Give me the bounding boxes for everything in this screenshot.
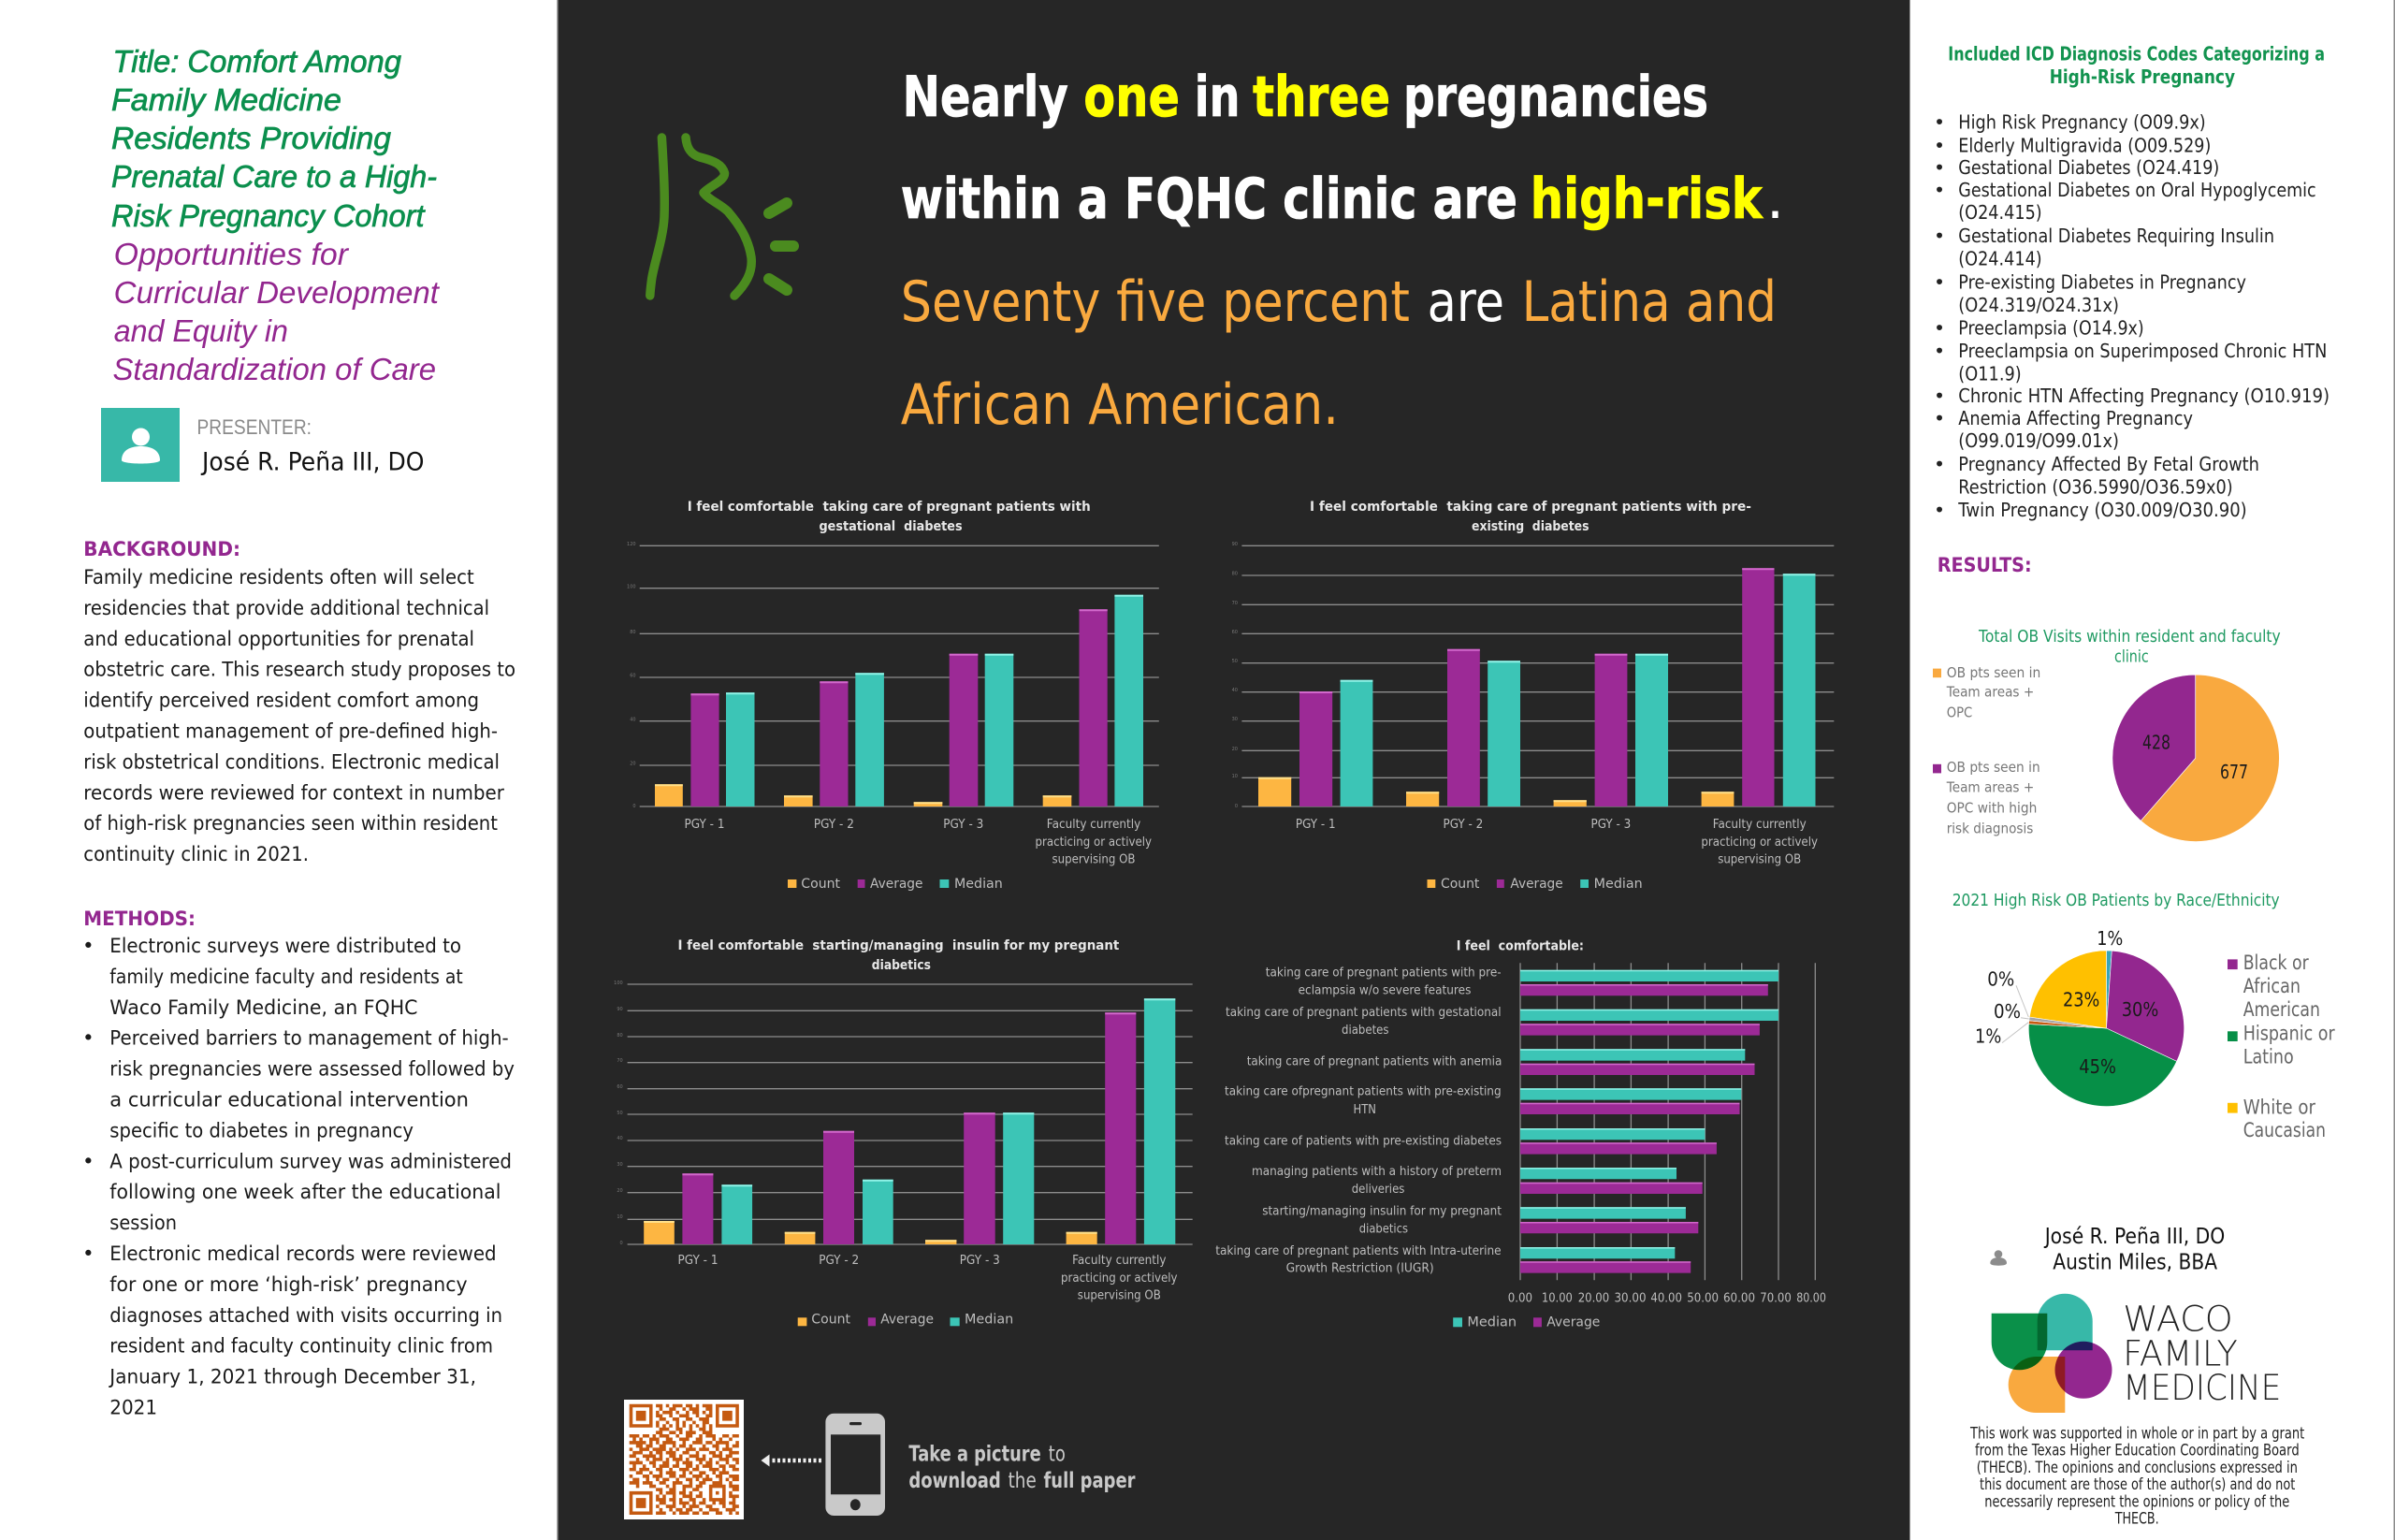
category labels: PGY - 3 (960, 1254, 1000, 1268)
list: ICD codes: (O99.019/O99.01x) (1958, 429, 2119, 452)
legend: Caucasian (2243, 1119, 2326, 1141)
chart title: I feel comfortable starting/managing insulin for my pregnant (677, 938, 1119, 953)
category labels: managing patients with a history of preterm (1252, 1165, 1502, 1179)
category labels: supervising OB (1078, 1289, 1161, 1303)
chart title: I feel comfortable: (1457, 939, 1584, 954)
authors (2043, 1225, 2225, 1275)
category labels: supervising OB (1052, 853, 1136, 867)
panel: dark centre background (558, 0, 1910, 1540)
list: ICD codes: Chronic HTN Affecting Pregnancy (O10.919) (1958, 385, 2330, 407)
legend: Average (880, 1312, 934, 1327)
list: ICD codes: • (1934, 110, 1945, 133)
y axis ticks: 80 (1232, 571, 1238, 576)
bar chart: gestational diabetes (627, 500, 1159, 892)
list: ICD codes: • (1934, 179, 1945, 201)
y axis ticks: 50 (1232, 659, 1238, 664)
legend: Average (1546, 1315, 1600, 1330)
headline statistic: . (1766, 167, 1784, 232)
legend: risk diagnosis (1947, 821, 2033, 837)
chart title: gestational diabetes (820, 519, 963, 534)
category labels (677, 1254, 1178, 1303)
value labels (1975, 927, 2158, 1078)
headline statistic: are (1428, 269, 1504, 335)
legend: Count (811, 1312, 851, 1327)
y axis ticks: 120 (627, 542, 636, 547)
text block: background: records were reviewed for context in number (83, 781, 504, 805)
y axis ticks: 40 (617, 1136, 623, 1141)
call to action text: full paper (1044, 1469, 1136, 1493)
legend: Black or (2243, 952, 2309, 974)
category labels (1215, 966, 1502, 1276)
category labels: eclampsia w/o severe features (1299, 983, 1472, 997)
value labels: 677 (2220, 761, 2248, 783)
category labels: practicing or actively (1061, 1271, 1178, 1286)
bar chart: insulin (614, 938, 1193, 1327)
legend: Latino (2243, 1045, 2294, 1068)
logo: Waco Family Medicine (1992, 1294, 2281, 1413)
list: ICD codes: • (1934, 225, 1945, 247)
x axis labels: 10.00 (1542, 1292, 1573, 1306)
chart title: clinic (2114, 648, 2149, 667)
heading: background: BACKGROUND: (83, 538, 240, 560)
category labels: taking care of pregnant patients with anemia (1247, 1055, 1502, 1069)
panel: left column (82, 44, 515, 1419)
heading: methods: METHODS: (83, 908, 196, 930)
category labels: taking care ofpregnant patients with pre-existing (1225, 1085, 1502, 1099)
text block: methods: • (82, 1150, 94, 1173)
y axis ticks (614, 981, 623, 1246)
logo wordmark (2123, 1300, 2281, 1408)
category labels: taking care of pregnant patients with gestational (1226, 1006, 1502, 1020)
text block: methods: family medicine faculty and residents at (109, 966, 463, 989)
category labels: Faculty currently (1713, 818, 1807, 832)
QR code (624, 1400, 744, 1519)
list: ICD codes: • (1934, 385, 1945, 407)
headline statistic: Nearly (903, 65, 1068, 130)
list: ICD codes: Preeclampsia (O14.9x) (1958, 316, 2144, 339)
disclaimer (1969, 1424, 2305, 1527)
category labels: Faculty currently (1047, 818, 1140, 832)
legend: Median (965, 1312, 1013, 1327)
icon: phone (825, 1414, 885, 1516)
call to action text: the (1009, 1469, 1037, 1493)
value labels: 45% (2079, 1055, 2116, 1078)
list: ICD codes: • (1934, 453, 1945, 475)
panel: right column (1933, 42, 2335, 1527)
text block: background: identify perceived resident comfort among (83, 690, 479, 713)
y axis ticks: 60 (617, 1084, 623, 1090)
title: Risk Pregnancy Cohort (111, 198, 426, 233)
title: Title: Comfort Among (112, 44, 402, 79)
authors: Austin Miles, BBA (2053, 1251, 2217, 1275)
chart title (1978, 628, 2281, 667)
text block: methods: A post-curriculum survey was administered (109, 1150, 512, 1173)
category labels: taking care of pregnant patients with Intra-uterine (1215, 1244, 1502, 1258)
category labels: PGY - 3 (943, 818, 983, 832)
y axis ticks: 30 (617, 1162, 623, 1168)
headline statistic: African American. (901, 372, 1339, 438)
icon: pregnant silhouette (650, 138, 793, 296)
list: ICD codes (1934, 110, 2330, 521)
legend (1933, 664, 2040, 837)
legend: Median (954, 877, 1003, 892)
disclaimer: necessarily represent the opinions or policy of the (1984, 1492, 2289, 1510)
y axis ticks: 30 (1232, 717, 1238, 722)
y axis ticks: 90 (617, 1007, 623, 1012)
title: Family Medicine (111, 82, 341, 117)
category labels: HTN (1353, 1103, 1376, 1117)
text block: methods: resident and faculty continuity clinic from (109, 1335, 493, 1358)
legend: Average (870, 877, 922, 892)
headline statistic: Seventy five percent (901, 269, 1410, 335)
legend: OPC with high (1947, 799, 2037, 816)
x axis labels: 30.00 (1615, 1292, 1647, 1306)
list: ICD codes: • (1934, 499, 1945, 521)
legend: OPC (1947, 704, 1972, 720)
x axis labels: 40.00 (1650, 1292, 1682, 1306)
legend: American (2243, 998, 2320, 1021)
bars: median (1341, 574, 1815, 806)
legend: OB pts seen in (1947, 759, 2040, 776)
list: ICD codes: Gestational Diabetes Requiring Insulin (1958, 225, 2274, 247)
headline statistic: high-risk (1531, 167, 1764, 232)
disclaimer: this document are those of the author(s) and do not (1980, 1475, 2296, 1493)
y axis ticks: 20 (617, 1188, 623, 1194)
list: ICD codes: Restriction (O36.5990/O36.59x0) (1958, 475, 2233, 498)
list: ICD codes: (O11.9) (1958, 362, 2022, 385)
category labels: PGY - 2 (814, 818, 854, 832)
y axis ticks: 10 (617, 1214, 623, 1220)
legend: Count (801, 877, 841, 892)
headline statistic: one (1083, 65, 1180, 130)
y axis ticks: 70 (1232, 601, 1238, 606)
text block: methods: • (82, 935, 94, 958)
legend: Median (1594, 877, 1643, 892)
text block: methods: specific to diabetes in pregnancy (109, 1119, 414, 1142)
text block: background: of high-risk pregnancies seen within resident (83, 812, 498, 835)
y axis ticks: 50 (617, 1111, 623, 1116)
y axis ticks: 60 (1232, 630, 1238, 635)
list: ICD codes: Gestational Diabetes on Oral Hypoglycemic (1958, 179, 2316, 201)
title: Opportunities for (114, 237, 350, 271)
list: ICD codes: Gestational Diabetes (O24.419) (1958, 156, 2219, 179)
text block: background: continuity clinic in 2021. (83, 843, 309, 866)
x axis labels: 50.00 (1687, 1292, 1719, 1306)
pie chart: race and ethnicity (1952, 892, 2335, 1141)
headline statistic: Latina and (1522, 269, 1777, 335)
legend: Average (1510, 877, 1563, 892)
presenter label: PRESENTER: (196, 415, 312, 439)
legend (788, 877, 1003, 892)
title: Residents Providing (111, 121, 392, 155)
list: ICD codes: Elderly Multigravida (O09.529) (1958, 134, 2211, 156)
chart title: I feel comfortable taking care of pregnant patients with (688, 500, 1091, 515)
bars: average (682, 1012, 1136, 1244)
x axis labels: 80.00 (1796, 1292, 1826, 1306)
category labels: taking care of patients with pre-existing diabetes (1225, 1134, 1502, 1148)
category labels: PGY - 1 (685, 818, 724, 832)
heading: ICD codes (1948, 42, 2325, 88)
text block: background: obstetric care. This research study proposes to (83, 659, 515, 682)
heading: results: RESULTS: (1938, 554, 2032, 576)
y axis ticks: 90 (1232, 542, 1238, 547)
bars: count (1258, 777, 1734, 806)
logo mark (1992, 1294, 2112, 1413)
text block: methods: January 1, 2021 through December 31, (108, 1366, 476, 1389)
headline statistic: pregnancies (1403, 65, 1708, 130)
value labels: 0% (1994, 1000, 2021, 1023)
legend (1428, 877, 1643, 892)
disclaimer: THECB. (2114, 1509, 2159, 1527)
y axis ticks: 40 (1232, 688, 1238, 693)
text block: methods: 2021 (109, 1396, 157, 1420)
y axis ticks: 60 (630, 674, 636, 679)
list: ICD codes: (O24.319/O24.31x) (1958, 294, 2119, 316)
y axis ticks: 100 (627, 584, 636, 589)
value labels: 0% (1987, 967, 2014, 990)
text block: methods: • (82, 1242, 94, 1266)
text block: methods: following one week after the educational (109, 1181, 501, 1204)
title: Prenatal Care to a High- (111, 159, 437, 194)
legend: White or (2243, 1096, 2315, 1118)
chart title: diabetics (872, 958, 931, 973)
bars: median (726, 595, 1143, 806)
list: ICD codes: • (1934, 407, 1945, 429)
headline statistic: within a FQHC clinic are (901, 167, 1517, 232)
headline statistic (901, 65, 1784, 438)
text block: background: residencies that provide additional technical (83, 597, 489, 620)
text block: methods: • (82, 1027, 94, 1051)
y axis ticks (1232, 542, 1238, 809)
text block: methods: session (109, 1212, 177, 1235)
text block: methods: Perceived barriers to management of high- (109, 1027, 509, 1051)
x axis labels (1508, 1292, 1826, 1306)
legend (1453, 1315, 1600, 1330)
title: Curricular Development (114, 275, 441, 310)
list: ICD codes: Pre-existing Diabetes in Pregnancy (1958, 270, 2246, 293)
legend: Hispanic or (2243, 1022, 2335, 1044)
call to action text (908, 1443, 1136, 1493)
y axis ticks: 70 (617, 1058, 623, 1064)
list: ICD codes: • (1934, 156, 1945, 179)
call to action text: Take a picture (908, 1443, 1041, 1467)
category labels (685, 818, 1152, 867)
y axis ticks: 100 (614, 981, 623, 986)
title: Standardization of Care (112, 352, 436, 386)
title: and Equity in (114, 313, 288, 348)
heading: ICD codes: High-Risk Pregnancy (2050, 65, 2235, 88)
logo wordmark: WACO (2123, 1300, 2233, 1340)
text block: background (83, 566, 515, 866)
category labels: Faculty currently (1072, 1254, 1167, 1268)
bars: average (1520, 984, 1768, 1273)
category labels: PGY - 2 (819, 1254, 859, 1268)
headline statistic: three (1253, 65, 1390, 130)
list: ICD codes: Pregnancy Affected By Fetal Growth (1958, 453, 2259, 475)
category labels: PGY - 2 (1443, 818, 1483, 832)
y axis ticks: 20 (630, 762, 636, 767)
y axis ticks: 0 (1235, 804, 1238, 809)
legend: Median (1467, 1315, 1517, 1330)
pie slices (2028, 951, 2185, 1107)
list: ICD codes: • (1934, 340, 1945, 362)
text block: background: risk obstetrical conditions. Electronic medical (83, 750, 500, 774)
presenter name: José R. Peña III, DO (200, 447, 425, 477)
text block: methods (82, 935, 515, 1420)
chart title: I feel comfortable taking care of pregnant patients with pre- (1310, 500, 1751, 515)
category labels: deliveries (1352, 1183, 1405, 1197)
call to action text: to (1049, 1443, 1066, 1467)
list: ICD codes: • (1934, 316, 1945, 339)
category labels: PGY - 3 (1590, 818, 1631, 832)
value labels: 428 (2142, 732, 2170, 754)
bar chart: pre-existing diabetes (1232, 500, 1834, 892)
y axis ticks: 0 (620, 1241, 623, 1246)
list: ICD codes: Preeclampsia on Superimposed Chronic HTN (1958, 340, 2327, 362)
y axis ticks: 20 (1232, 747, 1238, 752)
text block: background: Family medicine residents often will select (83, 566, 474, 589)
text block: background: outpatient management of pre-defined high- (83, 720, 498, 743)
x axis labels: 20.00 (1578, 1292, 1609, 1306)
y axis ticks (627, 542, 636, 809)
list: ICD codes: • (1934, 270, 1945, 293)
text block: methods: risk pregnancies were assessed followed by (109, 1058, 515, 1082)
x axis labels: 0.00 (1508, 1292, 1532, 1306)
chart title: 2021 High Risk OB Patients by Race/Ethnicity (1952, 892, 2280, 910)
text block: methods: for one or more ‘high-risk’ pregnancy (109, 1273, 468, 1297)
value labels: 1% (1975, 1025, 2001, 1048)
y axis ticks: 10 (1232, 774, 1238, 779)
category labels: practicing or actively (1701, 835, 1818, 850)
list: ICD codes: Anemia Affecting Pregnancy (1958, 407, 2193, 429)
text block: methods: Waco Family Medicine, an FQHC (109, 996, 418, 1020)
list: ICD codes: (O24.414) (1958, 248, 2042, 270)
chart title (688, 500, 1091, 534)
chart title (677, 938, 1119, 973)
category labels: starting/managing insulin for my pregnant (1262, 1204, 1502, 1218)
icon: presenter (101, 408, 180, 482)
pie chart: total OB visits (1933, 628, 2281, 841)
disclaimer: from the Texas Higher Education Coordinating Board (1975, 1441, 2300, 1459)
value labels: 30% (2122, 998, 2158, 1021)
category labels: PGY - 1 (1296, 818, 1336, 832)
authors: José R. Peña III, DO (2043, 1225, 2225, 1249)
legend: Team areas + (1946, 683, 2034, 700)
call to action text: download (908, 1469, 1001, 1493)
logo wordmark: MEDICINE (2123, 1368, 2281, 1408)
pie slices (2112, 675, 2279, 841)
text block: methods: a curricular educational intervention (109, 1089, 469, 1111)
bars: median (721, 998, 1175, 1244)
y axis ticks: 40 (630, 717, 636, 722)
bars: count (644, 1221, 1097, 1244)
text block: background: and educational opportunities for prenatal (83, 628, 474, 651)
legend (2228, 952, 2335, 1141)
y axis ticks: 0 (632, 804, 636, 809)
bars: median (1520, 970, 1778, 1258)
chart title: Total OB Visits within resident and faculty (1978, 628, 2281, 647)
x axis labels: 60.00 (1723, 1292, 1755, 1306)
value labels (2142, 732, 2248, 783)
text block: methods: diagnoses attached with visits occurring in (109, 1304, 502, 1328)
y axis ticks: 80 (617, 1033, 623, 1039)
category labels: diabetics (1359, 1222, 1408, 1236)
icon: authors (1990, 1250, 2007, 1266)
category labels: taking care of pregnant patients with pre- (1266, 966, 1502, 980)
bars: count (655, 784, 1071, 806)
legend (798, 1312, 1013, 1327)
chart title: existing diabetes (1472, 519, 1589, 534)
y axis ticks: 80 (630, 630, 636, 635)
x axis labels: 70.00 (1760, 1292, 1792, 1306)
category labels: diabetes (1342, 1024, 1389, 1038)
list: ICD codes: High Risk Pregnancy (O09.9x) (1958, 110, 2206, 133)
disclaimer: (THECB). The opinions and conclusions expressed in (1977, 1459, 2298, 1476)
list: ICD codes: • (1934, 134, 1945, 156)
headline statistic: in (1195, 65, 1240, 130)
legend: African (2243, 975, 2301, 997)
bars: average (690, 609, 1108, 806)
text block: methods: Electronic surveys were distributed to (109, 935, 461, 958)
category labels: PGY - 1 (677, 1254, 718, 1268)
text block: methods: Electronic medical records were reviewed (109, 1242, 497, 1266)
list: ICD codes: Twin Pregnancy (O30.009/O30.90) (1957, 499, 2247, 521)
legend: Team areas + (1946, 779, 2034, 796)
legend: OB pts seen in (1947, 664, 2040, 681)
chart title (1310, 500, 1751, 534)
logo wordmark: FAMILY (2123, 1333, 2238, 1373)
title (111, 44, 441, 386)
legend: Count (1441, 877, 1480, 892)
bar chart: I feel comfortable horizontal (1215, 939, 1826, 1330)
category labels (1296, 818, 1818, 867)
value labels: 23% (2063, 988, 2099, 1010)
list: ICD codes: (O24.415) (1958, 201, 2042, 224)
category labels: supervising OB (1718, 853, 1801, 867)
category labels: Growth Restriction (IUGR) (1286, 1262, 1434, 1276)
value labels: 1% (2097, 927, 2123, 950)
arrow: dotted to QR (762, 1454, 821, 1467)
disclaimer: This work was supported in whole or in part by a grant (1969, 1424, 2305, 1442)
bars: average (1299, 568, 1774, 806)
category labels: practicing or actively (1035, 835, 1152, 850)
